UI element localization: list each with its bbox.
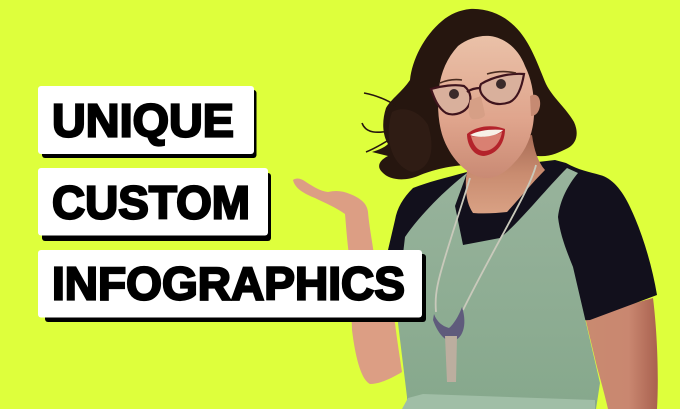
face: [438, 36, 534, 178]
belt: [402, 394, 595, 409]
glasses: [431, 74, 524, 114]
ear: [530, 95, 540, 116]
arm: right arm: [585, 298, 658, 409]
heading: CUSTOM label: [38, 168, 271, 241]
nose: [469, 96, 485, 119]
black t-shirt: [388, 160, 657, 330]
heading: INFOGRAPHICS label: [38, 250, 426, 322]
dress: [398, 168, 600, 409]
heading: UNIQUE label: [38, 86, 256, 158]
heading: UNIQUE label: UNIQUE: [52, 94, 234, 146]
eyes: [449, 79, 506, 99]
necklace: [433, 165, 536, 382]
mouth: [467, 126, 505, 156]
heading: CUSTOM label: CUSTOM: [52, 176, 250, 228]
neck and chest: [466, 135, 545, 213]
hair: [362, 9, 577, 179]
heading: INFOGRAPHICS label: INFOGRAPHICS: [52, 258, 405, 310]
eyebrows: [440, 72, 516, 83]
arm: raised left arm and open hand: [293, 179, 402, 384]
person: [293, 9, 658, 409]
